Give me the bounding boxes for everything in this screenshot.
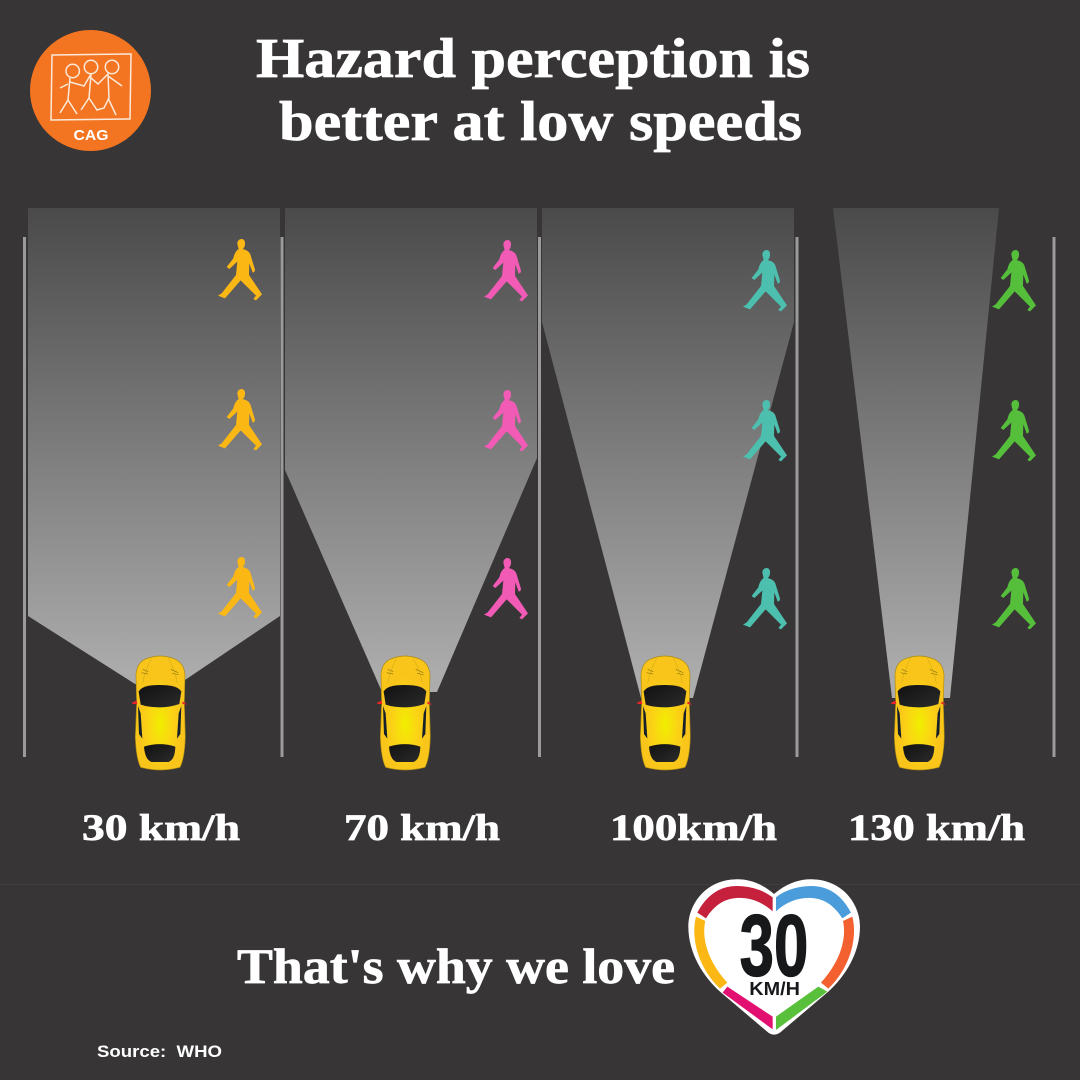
speed label: 70 km/h: 70 km/h	[344, 808, 501, 849]
speed label: 100 km/h: 100km/h	[610, 808, 778, 849]
car: 70 km/h	[377, 656, 432, 770]
logo: CAG	[30, 30, 151, 151]
vision cone: 30 km/h	[28, 208, 280, 684]
icon: 30 km/h heart: 30	[740, 896, 808, 994]
icon: 30 km/h heart	[688, 879, 860, 1035]
speed label: 130 km/h: 130 km/h	[848, 808, 1025, 849]
car: 100 km/h	[637, 656, 692, 770]
vision cone: 100 km/h	[542, 208, 794, 698]
pedestrians: pink	[484, 240, 528, 619]
pedestrians: yellow	[218, 239, 262, 618]
speed label: 30 km/h: 30 km/h	[82, 808, 241, 849]
vision cone: 70 km/h	[285, 208, 537, 692]
source: Source: WHO	[97, 1042, 222, 1061]
title: Hazard perception is	[256, 28, 810, 90]
icon: 30 km/h heart: KM/H	[749, 978, 800, 999]
road edge lines	[23, 237, 1056, 757]
pedestrians: green	[992, 250, 1036, 629]
tagline: That's why we love	[237, 938, 675, 994]
title	[256, 28, 810, 153]
car: 30 km/h	[132, 656, 187, 770]
title: better at low speeds	[279, 91, 802, 153]
vision cone: 130 km/h	[833, 208, 999, 698]
logo text: CAG	[74, 127, 108, 144]
pedestrians: teal	[743, 250, 787, 629]
car: 130 km/h	[891, 656, 946, 770]
